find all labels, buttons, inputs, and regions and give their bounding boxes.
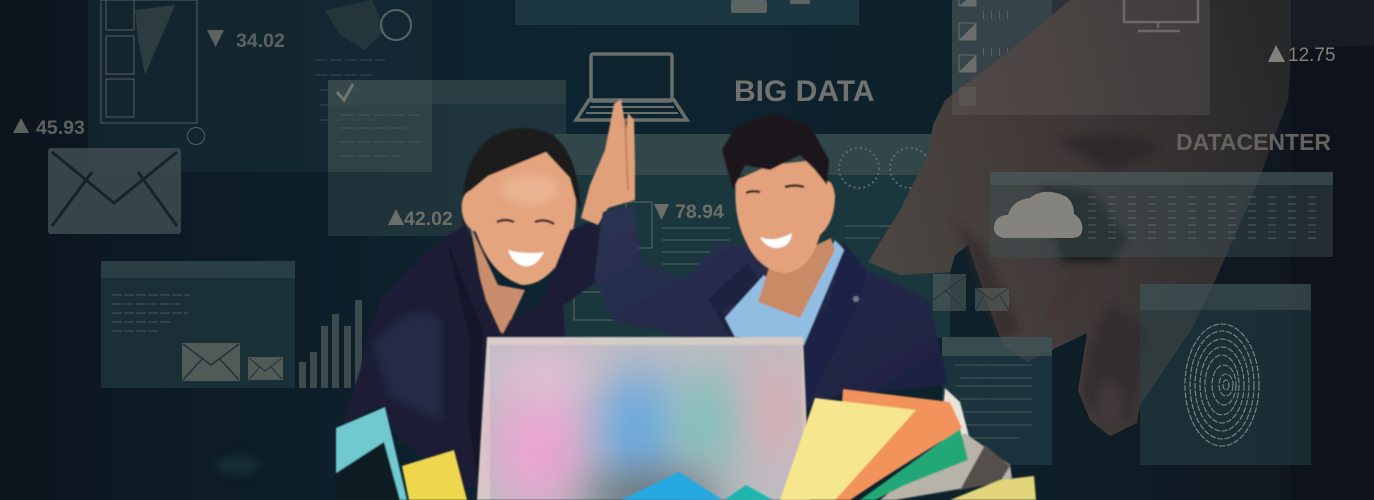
panel: text lower right: [942, 337, 1052, 465]
white backing: [940, 388, 970, 440]
woman neck: [470, 225, 525, 335]
panel: mail window: [101, 261, 295, 388]
right column overlay panel: [952, 0, 1210, 115]
woman face: [462, 152, 576, 285]
stat: 42.02: 42.02: [404, 208, 453, 230]
panel: top left map: [88, 0, 432, 172]
woman hair: [462, 128, 581, 235]
man face: [735, 160, 835, 273]
man shirt: [725, 240, 844, 345]
stat: 78.94: [654, 201, 724, 223]
woman eyes: [497, 220, 554, 224]
heading: datacenter: DATACENTER: [1176, 129, 1331, 155]
woman smile: [508, 250, 544, 266]
stat: 34.02: [207, 30, 285, 52]
stat: 12.75: 12.75: [1288, 45, 1336, 66]
green divider: [860, 428, 968, 500]
mail icons right: [933, 274, 1009, 311]
bottom yellow sheet: [950, 476, 1036, 500]
right edge darkening: [1291, 46, 1374, 500]
icon: large envelope: [48, 148, 181, 234]
binder gray: [880, 433, 1012, 500]
stat: 78.94: 78.94: [675, 201, 724, 223]
panel: right column icons: [952, 0, 1052, 115]
person: man: [594, 113, 947, 413]
bottom glow: [216, 455, 260, 475]
icon: laptop: [576, 54, 687, 120]
folder: teal bottom: [724, 485, 773, 500]
heading: big data: BIG DATA: [734, 75, 875, 108]
folder stack right: [780, 388, 1036, 500]
man neck: [758, 238, 835, 318]
panel: central dashboard: [555, 134, 950, 338]
yellow sheet: [780, 398, 916, 500]
panel: checklist centre left: [328, 80, 566, 236]
top right corner dark band: [1291, 0, 1374, 46]
man hair: [722, 113, 829, 190]
man jacket: [594, 206, 947, 413]
person: woman: [344, 128, 600, 488]
woman forehead light: [502, 175, 558, 205]
folder: left yellow: [402, 450, 467, 500]
panel: fingerprint: [1140, 284, 1311, 465]
hand details: [948, 134, 1160, 432]
folder: left teal binder: [336, 407, 407, 500]
panel: top centre strip: [515, 0, 859, 25]
bar chart: [299, 300, 362, 388]
raised hands: [581, 99, 635, 225]
laptop lid: [477, 337, 810, 500]
panel: data table with cloud: [990, 172, 1333, 257]
icon: fingerprint: [1185, 324, 1259, 446]
stat: 34.02: 34.02: [236, 30, 285, 52]
icon: cloud: [994, 192, 1082, 238]
stat: 45.93: [13, 117, 85, 139]
man smile: [760, 233, 792, 248]
man eyes: [746, 186, 804, 193]
hand silhouette overlay: [868, 0, 1374, 436]
folder: blue bottom: [621, 472, 720, 500]
stat: 45.93: 45.93: [36, 117, 85, 139]
orange divider: [835, 389, 962, 500]
woman jacket: [344, 218, 600, 488]
